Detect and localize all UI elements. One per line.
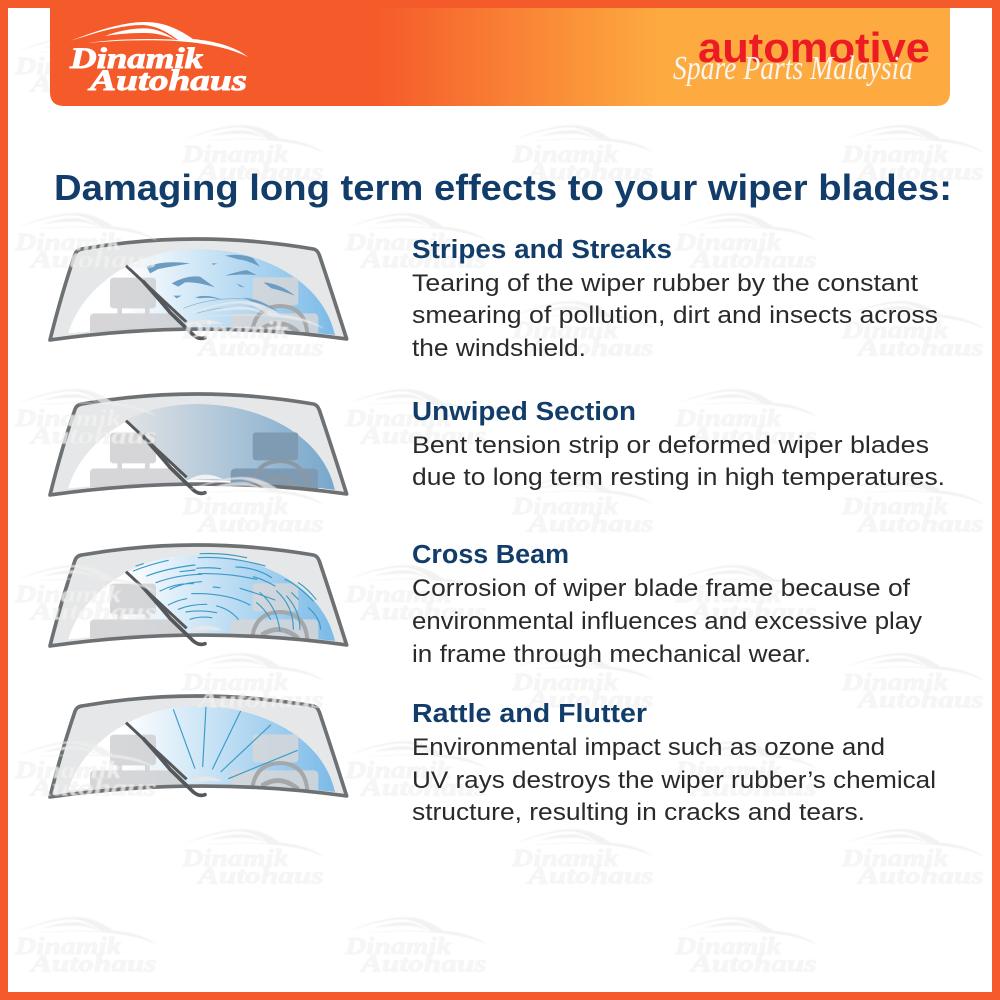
watermark pattern: Dinamik <box>841 494 948 520</box>
watermark pattern: Autohaus <box>28 71 157 97</box>
watermark pattern: Autohaus <box>28 599 157 625</box>
watermark pattern: Dinamik <box>511 142 618 168</box>
watermark pattern: Autohaus <box>855 335 984 361</box>
watermark pattern: Dinamik <box>841 846 948 872</box>
watermark pattern: Dinamik <box>181 670 288 696</box>
watermark pattern: Dinamik <box>841 670 948 696</box>
watermark pattern: Dinamik <box>181 846 288 872</box>
text block: cross beam: environmental influences and excessive play <box>412 608 923 635</box>
text block: unwiped section: Bent tension strip or deformed wiper blades <box>412 432 929 459</box>
watermark pattern: Autohaus <box>688 247 817 273</box>
watermark pattern: Autohaus <box>358 423 487 449</box>
brand word: automotive: automotive <box>698 24 930 71</box>
text block: cross beam <box>412 541 923 668</box>
watermark pattern: Autohaus <box>688 423 817 449</box>
watermark pattern: Dinamik <box>181 494 288 520</box>
text block: rattle and flutter: Rattle and Flutter <box>412 700 647 728</box>
text block: cross beam: Cross Beam <box>412 541 569 569</box>
watermark pattern: Dinamik <box>511 318 618 344</box>
text block: cross beam: Corrosion of wiper blade frame because of <box>412 575 910 602</box>
text block: stripes and streaks: smearing of pollution, dirt and insects across <box>412 302 938 329</box>
title: Damaging long term effects to your wiper blades: <box>54 167 952 208</box>
watermark pattern: Dinamik <box>344 934 451 960</box>
watermark pattern: Dinamik <box>674 934 781 960</box>
watermark pattern: Dinamik <box>841 142 948 168</box>
text block: stripes and streaks: the windshield. <box>412 335 586 362</box>
watermark pattern: Autohaus <box>688 775 817 801</box>
text block: unwiped section: Unwiped Section <box>412 398 636 426</box>
watermark pattern: Dinamik <box>181 142 288 168</box>
watermark pattern: Dinamik <box>344 406 451 432</box>
logo: Dinamik Autohaus: Dinamik <box>69 42 203 75</box>
watermark pattern: Autohaus <box>358 775 487 801</box>
watermark pattern: Autohaus <box>688 951 817 977</box>
watermark pattern: Autohaus <box>28 951 157 977</box>
text block: rattle and flutter <box>412 700 936 826</box>
watermark pattern: Dinamik <box>344 758 451 784</box>
watermark pattern: Autohaus <box>358 951 487 977</box>
watermark pattern: Dinamik <box>511 494 618 520</box>
windshield: cross beam <box>50 545 347 646</box>
tagline: Spare Parts Malaysia: Spare Parts Malaysia <box>673 50 913 87</box>
text block: unwiped section: due to long term resting in high temperatures. <box>412 464 945 491</box>
watermark pattern: Autohaus <box>195 863 324 889</box>
watermark pattern: Autohaus <box>855 159 984 185</box>
watermark pattern: Autohaus <box>855 511 984 537</box>
logo: Dinamik Autohaus <box>69 22 248 97</box>
watermark pattern: Autohaus <box>525 687 654 713</box>
text block: rattle and flutter: UV rays destroys the wiper rubber’s chemical <box>412 767 936 794</box>
watermark pattern: Autohaus <box>28 423 157 449</box>
watermark pattern: Dinamik <box>674 406 781 432</box>
text block: rattle and flutter: Environmental impact such as ozone and <box>412 734 885 761</box>
watermark pattern: Autohaus <box>855 863 984 889</box>
text block: cross beam: in frame through mechanical wear. <box>412 641 811 668</box>
watermark pattern: Autohaus <box>195 687 324 713</box>
watermark pattern: Dinamik <box>14 934 121 960</box>
watermark pattern: Dinamik <box>14 230 121 256</box>
watermark pattern: Autohaus <box>688 599 817 625</box>
watermark pattern: Autohaus <box>525 511 654 537</box>
watermark pattern: Autohaus <box>525 863 654 889</box>
windshield: unwiped section <box>50 394 347 495</box>
watermark pattern: Autohaus <box>358 247 487 273</box>
text block: unwiped section <box>412 398 945 491</box>
watermark pattern: Autohaus <box>195 511 324 537</box>
watermark pattern: Dinamik <box>344 230 451 256</box>
windshield: stripes and streaks <box>50 239 347 340</box>
watermark pattern: Autohaus <box>28 775 157 801</box>
windshield: rattle and flutter <box>50 696 347 797</box>
watermark pattern: Dinamik <box>14 582 121 608</box>
watermark pattern: Autohaus <box>358 599 487 625</box>
watermark pattern: Dinamik <box>674 230 781 256</box>
watermark pattern: Dinamik <box>511 846 618 872</box>
watermark pattern: Autohaus <box>195 159 324 185</box>
watermark pattern: Autohaus <box>525 335 654 361</box>
logo: Dinamik Autohaus: Autohaus <box>87 64 247 97</box>
watermark pattern: Autohaus <box>855 687 984 713</box>
watermark pattern: Autohaus <box>195 335 324 361</box>
watermark pattern: Dinamik <box>674 582 781 608</box>
header banner <box>50 8 950 106</box>
watermark pattern: Dinamik <box>841 318 948 344</box>
text block: stripes and streaks: Tearing of the wiper rubber by the constant <box>412 270 918 297</box>
watermark pattern: Dinamik <box>674 758 781 784</box>
watermark pattern: Dinamik <box>181 318 288 344</box>
text block: rattle and flutter: structure, resulting in cracks and tears. <box>412 799 865 826</box>
text block: stripes and streaks: Stripes and Streaks <box>412 236 672 264</box>
watermark pattern: Dinamik <box>14 54 121 80</box>
watermark pattern: Autohaus <box>28 247 157 273</box>
watermark pattern: Dinamik <box>14 758 121 784</box>
watermark pattern: Dinamik <box>344 582 451 608</box>
watermark pattern: Autohaus <box>525 159 654 185</box>
watermark pattern: Dinamik <box>511 670 618 696</box>
text block: stripes and streaks <box>412 236 938 362</box>
watermark pattern: Dinamik <box>14 406 121 432</box>
